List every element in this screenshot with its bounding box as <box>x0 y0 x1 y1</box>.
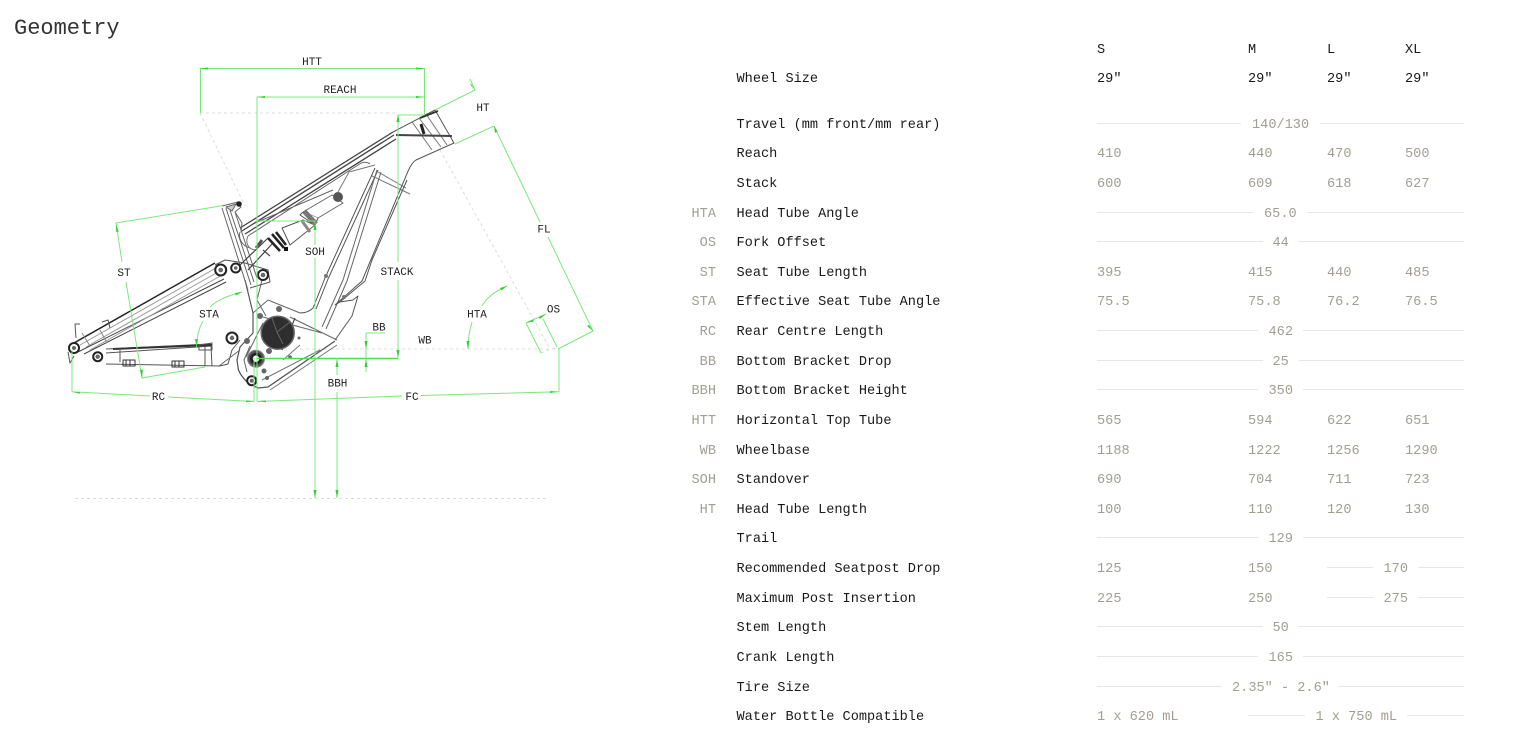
row: effective seat tube angle <box>692 295 1438 310</box>
row: horizontal top tube: 594 <box>1248 414 1272 429</box>
dimension labels: HTT <box>302 57 322 69</box>
row: head tube length: 100 <box>1097 503 1121 518</box>
row: wheelbase: 1188 <box>1097 444 1130 459</box>
table header: sizes: M <box>1248 43 1256 58</box>
dimension labels: FL <box>537 224 551 236</box>
row: bottom bracket height: 350 <box>1268 384 1293 399</box>
row: travel: 140/130 <box>1252 118 1309 133</box>
row: reach <box>736 147 1429 162</box>
row: head tube length: 120 <box>1327 503 1351 518</box>
row: stack: 600 <box>1097 177 1121 192</box>
row: wheelbase: 1222 <box>1248 444 1281 459</box>
row: stack: 609 <box>1248 177 1272 192</box>
row: reach: Reach <box>736 147 777 162</box>
row: crank length: Crank Length <box>736 651 834 666</box>
dimension labels: BB <box>372 322 386 334</box>
row: rear centre length: 462 <box>1268 325 1293 340</box>
table header: sizes: S <box>1097 43 1105 58</box>
table header: sizes: XL <box>1405 43 1421 58</box>
dimension labels: BBH <box>328 378 347 390</box>
dimension labels: REACH <box>323 85 357 97</box>
row: fork offset: Fork Offset <box>736 236 826 251</box>
row: maximum post insertion: 275 <box>1384 592 1408 607</box>
row: horizontal top tube: HTT <box>692 414 716 429</box>
row: standover <box>692 473 1429 488</box>
row: wheelbase: Wheelbase <box>736 444 810 459</box>
dimension labels: HT <box>476 103 490 115</box>
dimension labels: FC <box>405 392 419 404</box>
row: seat tube length: Seat Tube Length <box>736 266 867 281</box>
row: seat tube length: 395 <box>1097 266 1121 281</box>
row: tire size: 2.35" - 2.6" <box>1232 681 1330 696</box>
dimension labels: OS <box>547 304 560 316</box>
row: wheel size: Wheel Size <box>736 72 818 87</box>
row: stack <box>736 177 1429 192</box>
row: seat tube length: 485 <box>1405 266 1429 281</box>
row: horizontal top tube: 622 <box>1327 414 1351 429</box>
row: wheelbase <box>700 444 1438 459</box>
row: wheel size: 29" <box>1248 72 1272 87</box>
row: travel: Travel (mm front/mm rear) <box>736 118 940 133</box>
row: standover: 723 <box>1405 473 1429 488</box>
row: head tube angle <box>692 207 1464 222</box>
head tube <box>372 110 454 194</box>
row: wheel size: 29" <box>1405 72 1429 87</box>
row: effective seat tube angle: 76.2 <box>1327 295 1360 310</box>
dotted construction lines <box>75 113 557 498</box>
shock <box>240 192 343 270</box>
row: crank length: 165 <box>1268 651 1293 666</box>
row: reach: 500 <box>1405 147 1429 162</box>
row: tire size <box>736 681 1464 696</box>
row: rear centre length: Rear Centre Length <box>736 325 883 340</box>
seat stay and rocker <box>68 260 270 363</box>
row: head tube angle: 65.0 <box>1264 207 1297 222</box>
row: stack: 627 <box>1405 177 1429 192</box>
dimension labels: ST <box>117 268 131 280</box>
row: bottom bracket height: BBH <box>692 384 716 399</box>
row: maximum post insertion <box>736 592 1464 607</box>
row: head tube length <box>700 503 1429 518</box>
row: recommended seatpost drop: Recommended Seatpost Drop <box>736 562 940 577</box>
table header: sizes <box>1097 43 1421 58</box>
row: rear centre length <box>700 325 1464 340</box>
dimension labels: WB <box>418 336 432 348</box>
title: Geometry <box>14 16 120 41</box>
bike frame geometry diagram <box>68 57 594 499</box>
row: travel <box>736 118 1464 133</box>
row: standover: Standover <box>736 473 810 488</box>
row: seat tube length: 440 <box>1327 266 1351 281</box>
row: trail <box>736 532 1464 547</box>
row: bottom bracket drop <box>700 355 1464 370</box>
row: recommended seatpost drop: 170 <box>1384 562 1408 577</box>
row: stack: 618 <box>1327 177 1351 192</box>
row: water bottle compatible: 1 x 750 mL <box>1316 710 1397 725</box>
row: water bottle compatible <box>736 710 1464 725</box>
row: effective seat tube angle: STA <box>692 295 716 310</box>
row: head tube angle: HTA <box>692 207 716 222</box>
row: fork offset <box>700 236 1464 251</box>
row: fork offset: 44 <box>1272 236 1289 251</box>
row: water bottle compatible: Water Bottle Compatible <box>736 710 924 725</box>
row: wheel size: 29" <box>1327 72 1351 87</box>
row: head tube length: 130 <box>1405 503 1429 518</box>
row: maximum post insertion: 225 <box>1097 592 1121 607</box>
row: effective seat tube angle: 76.5 <box>1405 295 1438 310</box>
row: maximum post insertion: 250 <box>1248 592 1272 607</box>
row: head tube length: Head Tube Length <box>736 503 867 518</box>
row: seat tube length: ST <box>700 266 716 281</box>
row: seat tube length: 415 <box>1248 266 1272 281</box>
row: head tube length: HT <box>700 503 716 518</box>
row: trail: Trail <box>736 532 777 547</box>
seat tube <box>222 201 257 290</box>
row: standover: 690 <box>1097 473 1121 488</box>
row: standover: 704 <box>1248 473 1272 488</box>
row: recommended seatpost drop <box>736 562 1464 577</box>
row: head tube length: 110 <box>1248 503 1272 518</box>
row: reach: 410 <box>1097 147 1121 162</box>
row: wheel size: 29" <box>1097 72 1121 87</box>
dimension labels: SOH <box>305 247 325 259</box>
row: wheelbase: WB <box>700 444 716 459</box>
dimension labels <box>117 57 560 404</box>
row: horizontal top tube: 565 <box>1097 414 1121 429</box>
row: stem length: Stem Length <box>736 621 826 636</box>
row: standover: 711 <box>1327 473 1351 488</box>
row: stack: Stack <box>736 177 777 192</box>
row: effective seat tube angle: 75.8 <box>1248 295 1281 310</box>
row: reach: 440 <box>1248 147 1272 162</box>
row: maximum post insertion: Maximum Post Insertion <box>736 592 916 607</box>
down tube <box>300 168 407 340</box>
row: bottom bracket drop: BB <box>700 355 716 370</box>
row: standover: SOH <box>692 473 716 488</box>
row: recommended seatpost drop: 125 <box>1097 562 1121 577</box>
row: crank length <box>736 651 1464 666</box>
row: bottom bracket drop: Bottom Bracket Drop <box>736 355 892 370</box>
dimension labels: STA <box>199 310 219 322</box>
row: wheelbase: 1290 <box>1405 444 1438 459</box>
row: reach: 470 <box>1327 147 1351 162</box>
row: fork offset: OS <box>700 236 716 251</box>
frame linework <box>68 110 454 390</box>
row: bottom bracket drop: 25 <box>1272 355 1289 370</box>
green arrowheads <box>72 68 593 498</box>
chain stay <box>106 340 240 367</box>
row: horizontal top tube <box>692 414 1429 429</box>
row: stem length <box>736 621 1464 636</box>
row: seat tube length <box>700 266 1429 281</box>
row: horizontal top tube: Horizontal Top Tube <box>736 414 892 429</box>
row: head tube angle: Head Tube Angle <box>736 207 859 222</box>
motor <box>261 316 294 349</box>
green dimension lines <box>72 68 593 498</box>
dimension labels: STACK <box>380 267 414 279</box>
dimension labels: HTA <box>467 310 487 322</box>
row: stem length: 50 <box>1272 621 1289 636</box>
dimension labels: RC <box>152 392 165 404</box>
pivots and bottom bracket <box>69 264 300 385</box>
row: water bottle compatible: 1 x 620 mL <box>1097 710 1179 725</box>
row: wheelbase: 1256 <box>1327 444 1360 459</box>
row: recommended seatpost drop: 150 <box>1248 562 1272 577</box>
row: rear centre length: RC <box>700 325 716 340</box>
row: bottom bracket height: Bottom Bracket Height <box>736 384 908 399</box>
table header: sizes: L <box>1327 43 1335 58</box>
motor carrier <box>237 280 337 390</box>
row: effective seat tube angle: Effective Seat Tube Angle <box>736 295 940 310</box>
row: trail: 129 <box>1268 532 1293 547</box>
row: tire size: Tire Size <box>736 681 810 696</box>
top tube <box>239 132 396 250</box>
row: bottom bracket height <box>692 384 1464 399</box>
row: effective seat tube angle: 75.5 <box>1097 295 1130 310</box>
row: horizontal top tube: 651 <box>1405 414 1429 429</box>
row: wheel size <box>736 72 1429 87</box>
